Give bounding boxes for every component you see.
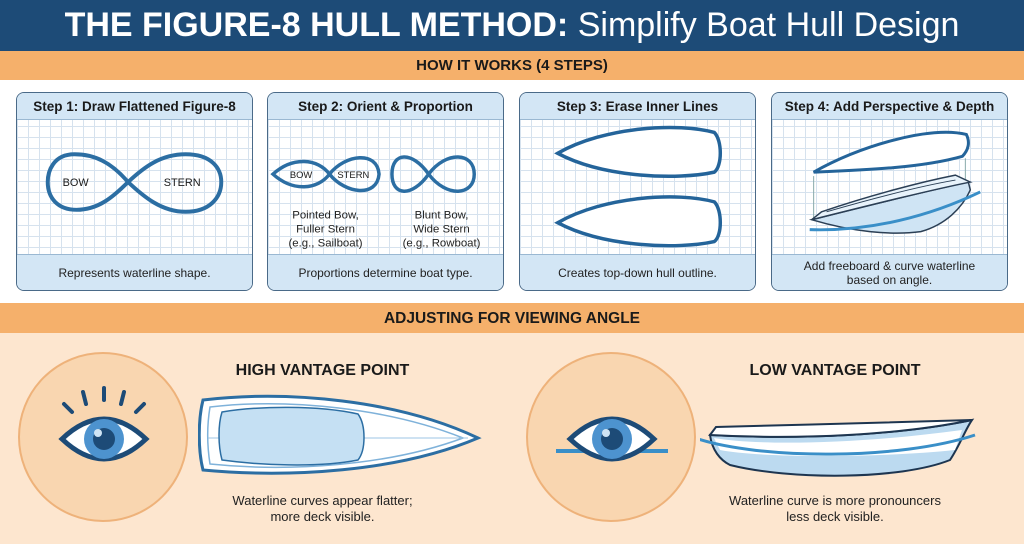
step 1 caption	[17, 254, 252, 290]
icon: high vantage eye	[18, 352, 188, 522]
step 4 heading	[772, 93, 1007, 120]
low vantage caption: less deck visible.	[786, 509, 884, 524]
two figure-8 variants: Blunt Bow,	[415, 210, 468, 222]
step 2 caption: Proportions determine boat type.	[298, 266, 473, 280]
low vantage boat	[700, 418, 976, 477]
step 4 heading: Step 4: Add Perspective & Depth	[785, 99, 994, 114]
step 2 caption	[268, 254, 503, 290]
icon: low vantage eye	[526, 352, 696, 522]
panel: step 1	[16, 92, 253, 291]
two figure-8 variants	[270, 155, 481, 249]
panel: step 3	[519, 92, 756, 291]
step 3 caption: Creates top-down hull outline.	[558, 266, 717, 280]
step 4 caption: based on angle.	[847, 272, 932, 286]
high vantage caption	[232, 493, 413, 524]
section band: how it works	[0, 51, 1024, 80]
hull outlines	[554, 126, 722, 248]
section band: how it works: HOW IT WORKS (4 STEPS)	[416, 57, 608, 74]
low vantage caption: Waterline curve is more pronouncers	[729, 493, 941, 508]
step 2 heading	[268, 93, 503, 120]
step 1 heading: Step 1: Draw Flattened Figure-8	[33, 99, 236, 114]
panel: step 4	[771, 92, 1008, 291]
step 3 heading	[520, 93, 755, 120]
high vantage caption: Waterline curves appear flatter;	[232, 493, 413, 508]
two figure-8 variants: (e.g., Rowboat)	[403, 237, 481, 249]
step 1 caption: Represents waterline shape.	[58, 266, 211, 280]
two figure-8 variants: Pointed Bow,	[292, 210, 359, 222]
two figure-8 variants: STERN	[337, 169, 369, 180]
step 2 heading: Step 2: Orient & Proportion	[298, 99, 473, 114]
step 3 heading: Step 3: Erase Inner Lines	[557, 99, 718, 114]
step 4 caption	[772, 254, 1007, 290]
panel: step 2	[267, 92, 504, 291]
two figure-8 variants: (e.g., Sailboat)	[288, 237, 363, 249]
section band: viewing angle	[0, 303, 1024, 333]
heading: high vantage point: HIGH VANTAGE POINT	[236, 362, 409, 379]
two figure-8 variants: Wide Stern	[413, 224, 470, 236]
perspective boat	[809, 130, 981, 234]
title bar: THE FIGURE-8 HULL METHOD: Simplify Boat Hull Design	[65, 6, 959, 44]
figure-8 drawing: BOW	[63, 177, 89, 189]
title bar	[0, 0, 1024, 51]
section band: viewing angle: ADJUSTING FOR VIEWING ANGLE	[384, 310, 640, 327]
high vantage caption: more deck visible.	[270, 509, 375, 524]
bottom background	[0, 333, 1024, 544]
low vantage caption	[729, 493, 941, 524]
two figure-8 variants: Fuller Stern	[296, 224, 355, 236]
step 1 heading	[17, 93, 252, 120]
step 4 caption: Add freeboard & curve waterline	[804, 258, 975, 272]
figure-8 drawing: STERN	[164, 177, 201, 189]
two figure-8 variants: BOW	[290, 169, 312, 180]
high vantage boat	[198, 394, 482, 475]
figure-8 drawing	[46, 152, 224, 214]
step 3 caption	[520, 254, 755, 290]
heading: low vantage point: LOW VANTAGE POINT	[750, 362, 920, 379]
